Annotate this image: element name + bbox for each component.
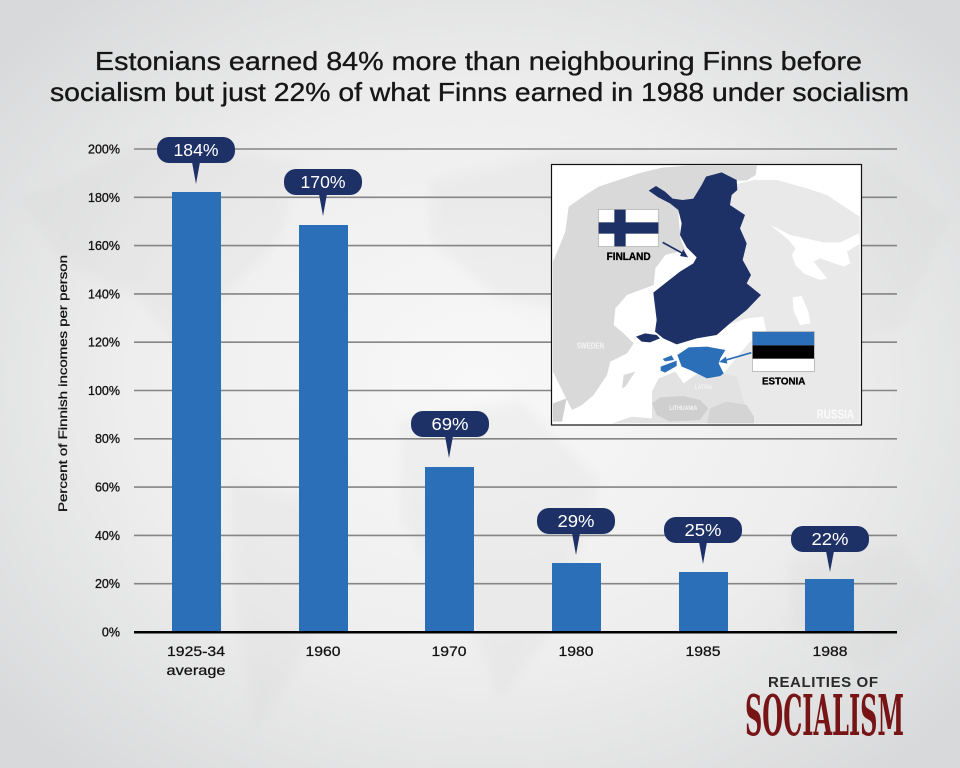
y-axis tick labels: 160% xyxy=(88,239,120,253)
map: Lake Ladoga xyxy=(793,296,810,325)
map: Gotland xyxy=(622,372,635,388)
title xyxy=(50,46,909,107)
x axis line xyxy=(134,631,897,634)
y-axis tick labels: 20% xyxy=(95,577,120,591)
map: Russia and neighbours xyxy=(707,180,860,423)
x-axis labels: average xyxy=(166,662,226,678)
callout: 25%: 25% xyxy=(684,520,722,540)
title: socialism but just 22% of what Finns earned in 1988 under socialism xyxy=(50,77,909,107)
y-axis tick labels: 140% xyxy=(88,288,120,302)
x-axis labels: 1970 xyxy=(432,643,467,659)
map: Poland coast xyxy=(612,417,652,423)
map: Latvia xyxy=(652,370,750,423)
map: Lake Onega-side gulf xyxy=(747,318,765,332)
y-axis tick labels: 80% xyxy=(95,432,120,446)
map: Lithuania xyxy=(652,396,708,422)
label: Russia: RUSSIA xyxy=(817,407,854,421)
map: Denmark xyxy=(553,398,567,422)
map: Estonia xyxy=(661,347,725,378)
y-axis tick labels: 180% xyxy=(88,191,120,205)
x-axis labels: 1960 xyxy=(306,643,341,659)
x-axis labels: 1985 xyxy=(686,643,721,659)
chart gridlines xyxy=(134,149,897,584)
label: Latvia: LATVIA xyxy=(695,384,712,391)
callout: 184% xyxy=(157,137,235,184)
callout: 29%: 29% xyxy=(558,511,594,531)
callout: 22% xyxy=(791,526,869,572)
y-axis tick labels: 100% xyxy=(88,384,120,398)
map: Åland islands xyxy=(636,333,660,342)
callout: 170% xyxy=(284,169,362,216)
callout: 29% xyxy=(537,508,615,555)
map: Sweden and Norway xyxy=(553,165,757,410)
flag: Estonia xyxy=(752,332,814,371)
y-axis tick labels: 200% xyxy=(88,142,120,156)
x-axis labels: 1988 xyxy=(812,643,848,659)
flag: Finland xyxy=(598,209,659,247)
callout: 170%: 170% xyxy=(300,172,346,192)
map: White Sea xyxy=(770,225,860,280)
arrow: Finland xyxy=(663,242,688,257)
logo: Realities of Socialism xyxy=(745,674,904,749)
label: Estonia: ESTONIA xyxy=(762,377,806,388)
callout: 25% xyxy=(664,517,742,564)
callout: 69%: 69% xyxy=(432,414,468,434)
x-axis labels: 1980 xyxy=(558,643,594,659)
logo: Realities of Socialism: REALITIES OF xyxy=(768,674,878,691)
y-axis title: Percent of Finnish incomes per person xyxy=(56,255,70,512)
map: Belarus xyxy=(707,402,754,423)
y-axis tick labels xyxy=(88,142,120,640)
arrow: Estonia xyxy=(719,353,751,364)
label: Sweden: SWEDEN xyxy=(577,342,604,351)
callout: 184%: 184% xyxy=(174,140,218,160)
label: Finland: FINLAND xyxy=(607,251,651,263)
callout: 69% xyxy=(411,411,489,458)
title: Estonians earned 84% more than neighbouring Finns before xyxy=(95,46,862,76)
callout: 22%: 22% xyxy=(812,529,848,549)
x-axis labels xyxy=(166,643,848,678)
panel: map inset xyxy=(552,164,862,425)
y-axis tick labels: 40% xyxy=(95,529,120,543)
x-axis labels: 1925-34 xyxy=(167,643,225,659)
y-axis tick labels: 120% xyxy=(88,336,120,350)
bars xyxy=(172,192,854,632)
y-axis tick labels: 60% xyxy=(95,480,120,494)
y-axis tick labels: 0% xyxy=(102,626,120,640)
map: Finland xyxy=(649,172,761,344)
label: Lithuania: LITHUANIA xyxy=(669,405,698,412)
